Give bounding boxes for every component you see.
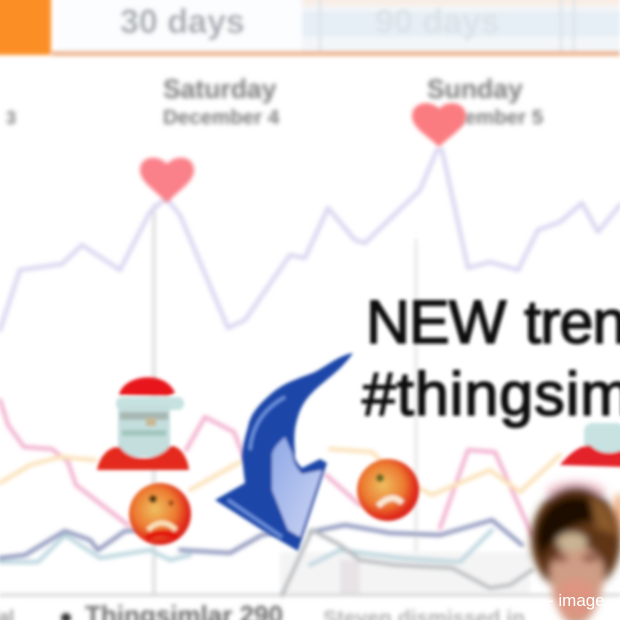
- arrow outline: [215, 353, 353, 551]
- active orange tab: [0, 0, 51, 55]
- label: Saturday December 4: [163, 74, 280, 129]
- arrow highlights: [228, 397, 285, 537]
- icon: blue curved arrow: [215, 353, 353, 551]
- icon: heart on Saturday: [140, 158, 194, 203]
- orange trend line: [0, 449, 560, 495]
- headline text: [362, 288, 620, 428]
- tab: 30 days: [58, 0, 302, 51]
- label: Sunday December 5: Sunday: [427, 74, 523, 104]
- watermark: - image: [548, 591, 605, 610]
- legend: [0, 600, 525, 620]
- label: Saturday December 4: Saturday: [163, 74, 277, 104]
- icon: santa stack: [97, 377, 189, 470]
- tab: faded days: [302, 0, 620, 51]
- tab: faded days: 90 days: [375, 3, 500, 41]
- photo: face: [531, 480, 620, 620]
- tab: 30 days: 30 days: [120, 3, 245, 41]
- icon: sad face left: [129, 483, 191, 545]
- legend marker: [61, 613, 71, 620]
- light blue trend line: [0, 530, 492, 565]
- baseline and shaded area: [0, 552, 620, 595]
- label: Sunday December 5: [427, 74, 543, 129]
- icon: heart on Sunday: [412, 103, 466, 147]
- purple trend line: [0, 150, 620, 330]
- pink trend line: [0, 400, 532, 535]
- label: previous date fragment: 3: [6, 108, 16, 128]
- label: Saturday December 4: December 4: [163, 106, 280, 129]
- tab bar: [0, 0, 620, 56]
- gray trend line: [282, 530, 532, 595]
- dark blue trend line: [0, 520, 522, 558]
- date labels: [6, 74, 543, 129]
- icon: partial santa right: [560, 423, 620, 467]
- arrow light belly: [272, 437, 322, 537]
- label: Sunday December 5: December 5: [427, 106, 543, 129]
- icon: sad face right: [357, 459, 419, 521]
- day gridlines: [154, 205, 416, 595]
- line chart: [0, 150, 620, 595]
- headline text: NEW tren: [366, 288, 620, 356]
